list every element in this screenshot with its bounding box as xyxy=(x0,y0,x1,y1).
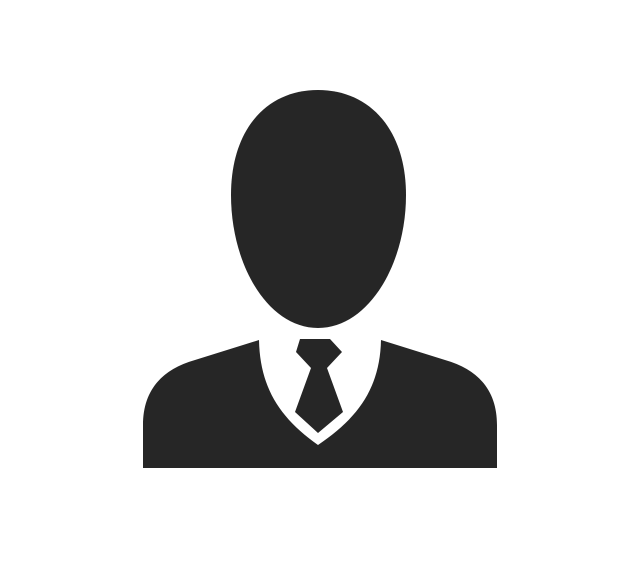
tie xyxy=(295,339,343,433)
head xyxy=(231,90,406,328)
body with V-neck xyxy=(143,340,497,468)
